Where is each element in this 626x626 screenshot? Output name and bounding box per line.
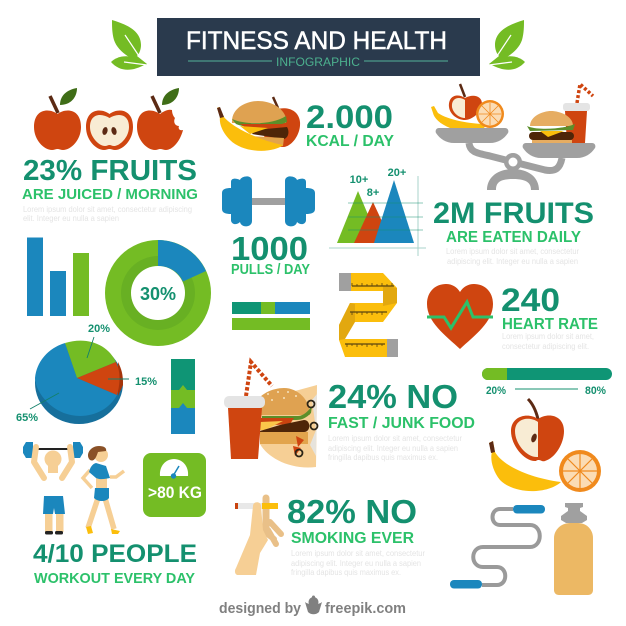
icon: dumbbell <box>222 176 315 226</box>
heading: 2M fruits: Lorem ipsum dolor sit amet, consectetur <box>446 247 579 256</box>
icon: freepik logo <box>305 596 322 614</box>
cut apple <box>86 110 133 150</box>
subtitle: INFOGRAPHIC <box>276 55 360 69</box>
area chart: triangles: 20+ <box>388 167 406 179</box>
icon: fast food <box>224 362 318 467</box>
heading: 4/10 people: WORKOUT EVERY DAY <box>34 570 195 587</box>
icon: measuring tape <box>339 273 398 357</box>
heading: 82% no: Lorem ipsum dolor sit amet, consectetur <box>291 549 425 558</box>
heading: 24% no: 24% NO <box>328 378 458 415</box>
whole apple <box>34 88 81 150</box>
scale base <box>487 169 539 190</box>
icon: balance scale <box>431 84 595 190</box>
area chart: triangles: 8+ <box>367 187 379 199</box>
footer credit: freepik.com <box>325 600 406 617</box>
heading: 23% fruits: Lorem ipsum dolor sit amet, consectetur adipiscing <box>23 205 192 214</box>
icon: jump rope <box>450 505 545 588</box>
left pan <box>436 128 508 143</box>
heading: 2M fruits: 2M FRUITS <box>433 197 594 230</box>
title banner <box>157 18 480 76</box>
bitten apple <box>137 88 183 150</box>
heading: 240 heart rate: 240 <box>501 282 560 318</box>
vertical stacked bar <box>171 359 195 434</box>
stacked bars <box>232 302 310 330</box>
heading: 1000 pulls: 1000 <box>231 230 308 267</box>
heading: 82% no: SMOKING EVER <box>291 530 414 547</box>
pie chart <box>16 323 157 424</box>
heading: 24% no: fringilla dapibus quis maximus ex. <box>328 453 438 462</box>
heading: 24% no: Lorem ipsum dolor sit amet, consectetur <box>328 434 462 443</box>
cup <box>228 408 262 459</box>
heading: 2M fruits: ARE EATEN DAILY <box>446 229 582 246</box>
heading: 4/10 people <box>33 540 197 587</box>
area chart: triangles <box>329 167 426 256</box>
heading: 24% no: adipiscing elit. Integer eu nulla a sapien <box>328 444 458 453</box>
bar chart <box>27 238 89 316</box>
progress bar: 80% <box>585 385 606 397</box>
straw <box>246 362 272 396</box>
heading: 23% fruits: elit. Integer eu nulla a sapien <box>23 214 119 223</box>
icon: weightlifter man <box>23 442 83 534</box>
weight badge <box>143 453 206 517</box>
icon: hand with cigarette <box>235 498 281 575</box>
heading: 2000 kcal: KCAL / DAY <box>306 133 395 150</box>
progress bar <box>482 368 612 397</box>
heading: 24% no: FAST / JUNK FOOD <box>328 415 475 432</box>
right pan <box>523 143 595 158</box>
footer credit: designed by <box>219 600 302 617</box>
heading: 82% no: adipiscing elit. Integer eu nulla a sapien <box>291 559 421 568</box>
donut chart <box>105 240 211 346</box>
heading: 4/10 people: 4/10 PEOPLE <box>33 540 197 568</box>
heading: 2M fruits: adipiscing elit. Integer eu nulla a sapien <box>447 257 578 266</box>
heading: 23% fruits <box>22 155 198 223</box>
heading: 2000 kcal <box>306 99 395 150</box>
heading: 1000 pulls: PULLS / DAY <box>231 261 310 278</box>
heading: 240 heart rate: HEART RATE <box>502 316 598 333</box>
heading: 2000 kcal: 2.000 <box>306 99 393 135</box>
icon: burger banana apple <box>217 97 300 151</box>
heading: 82% no: fringilla dapibus quis maximus ex. <box>291 568 401 577</box>
heading: 240 heart rate: consectetur adipiscing elit. <box>502 342 589 351</box>
heading: 24% no <box>328 378 475 462</box>
icon: fruit group <box>489 399 601 492</box>
heading: 82% no <box>287 493 425 577</box>
icon: water bottle <box>554 503 593 595</box>
progress bar: 20% <box>486 385 506 397</box>
burger <box>252 388 310 415</box>
icon: woman exercising <box>83 446 124 534</box>
heading: 240 heart rate <box>501 282 598 351</box>
donut chart: 30% <box>140 284 176 304</box>
heading: 2M fruits <box>433 197 594 266</box>
heading: 23% fruits: 23% FRUITS <box>23 155 197 187</box>
pizza slice <box>260 385 317 467</box>
weight badge: >80 KG <box>148 483 202 502</box>
pie chart: 15% <box>135 376 157 388</box>
scale beam <box>469 143 562 170</box>
icon: left leaves <box>111 20 147 70</box>
footer credit <box>219 596 406 617</box>
title: FITNESS AND HEALTH <box>186 27 447 55</box>
fruits on pan <box>431 84 504 128</box>
heading: 23% fruits: ARE JUICED / MORNING <box>22 186 198 203</box>
icon: right leaves <box>489 20 525 70</box>
burger and drink on pan <box>527 84 593 143</box>
heading: 240 heart rate: Lorem ipsum dolor sit amet, <box>502 332 594 341</box>
icon: three apples <box>34 88 183 150</box>
pie chart: 20% <box>88 323 110 335</box>
area chart: triangles: 10+ <box>350 174 368 186</box>
heading: 82% no: 82% NO <box>287 493 417 530</box>
pie chart: 65% <box>16 412 38 424</box>
olives <box>296 400 318 456</box>
icon: heart with pulse <box>427 284 493 349</box>
